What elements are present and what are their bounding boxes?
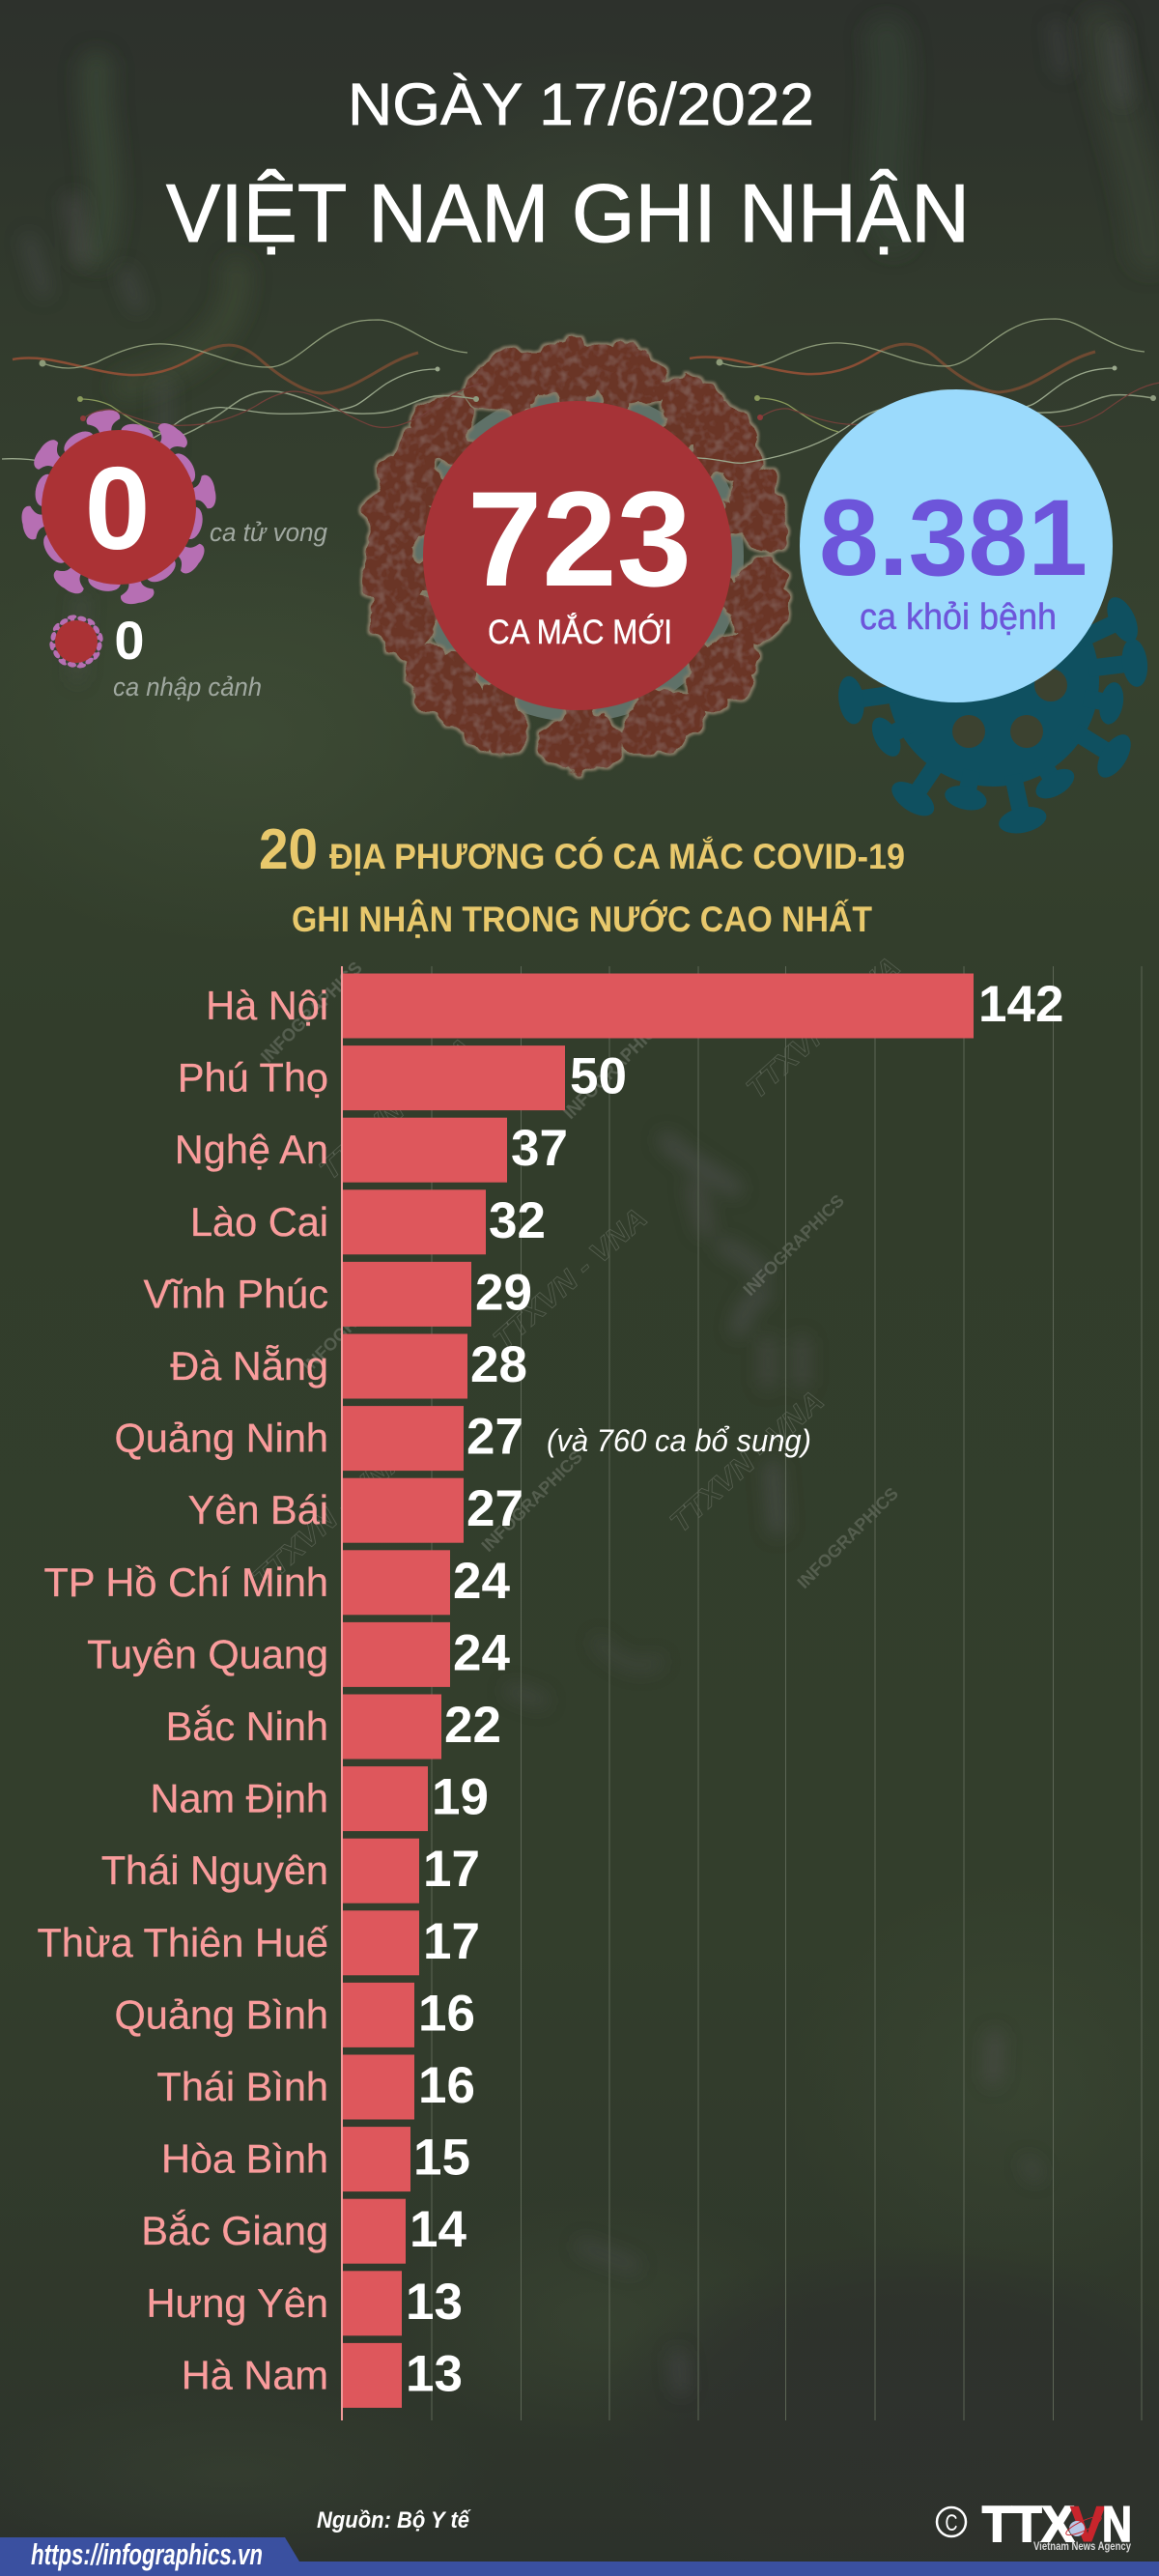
bar values: 22 xyxy=(444,1697,501,1754)
province labels: Hưng Yên xyxy=(146,2280,328,2326)
watermarks: TTXVN - VNA xyxy=(488,1202,654,1357)
chart heading: ĐỊA PHƯƠNG CÓ CA MẮC COVID-19 xyxy=(329,836,905,876)
watermarks: INFOGRAPHICS xyxy=(740,1191,848,1300)
province labels: Hà Nội xyxy=(206,983,328,1028)
bar values: 15 xyxy=(413,2130,470,2187)
bar values: 17 xyxy=(423,1913,480,1970)
province labels: Thái Nguyên xyxy=(101,1847,328,1893)
stat: imported cases xyxy=(49,610,262,701)
province labels: Yên Bái xyxy=(188,1487,328,1532)
watermarks: INFOGRAPHICS xyxy=(560,1015,668,1123)
bar: Bắc Ninh xyxy=(343,1695,441,1759)
icon: brown coronavirus behind new cases xyxy=(355,333,800,775)
bar values: 142 xyxy=(978,976,1063,1033)
bar: Hà Nam xyxy=(343,2343,402,2408)
province labels: Thừa Thiên Huế xyxy=(37,1920,328,1965)
logo: TTXVN: TTX xyxy=(982,2497,1074,2553)
logo: TTXVN: V xyxy=(1070,2497,1105,2553)
stat: new cases xyxy=(423,401,732,710)
bar: Thái Nguyên xyxy=(343,1839,419,1903)
bar values xyxy=(406,976,1063,2402)
bar values: 24 xyxy=(453,1624,510,1681)
stat: recovered xyxy=(800,389,1113,702)
bar: Thái Bình xyxy=(343,2054,414,2120)
footer bar xyxy=(0,2537,1159,2576)
chart heading xyxy=(259,817,905,939)
chart heading: 20 xyxy=(259,817,318,881)
bar: Quảng Bình xyxy=(343,1983,414,2047)
stat: deaths xyxy=(19,408,327,607)
bar: Bắc Giang xyxy=(343,2199,406,2264)
bar: Hà Nội xyxy=(343,974,974,1038)
bar: Phú Thọ xyxy=(343,1045,565,1110)
watermarks xyxy=(247,951,907,1595)
province labels: Hòa Bình xyxy=(161,2136,328,2182)
recovered value: 8.381 xyxy=(819,477,1088,598)
bar values: 24 xyxy=(453,1553,510,1610)
new cases value: 723 xyxy=(467,463,692,615)
deaths value: 0 xyxy=(85,443,150,574)
bar: Hòa Bình xyxy=(343,2127,410,2191)
deaths label: ca tử vong xyxy=(210,518,327,547)
icon: small purple virus xyxy=(49,615,103,669)
province labels: Hà Nam xyxy=(182,2352,328,2397)
province labels: TP Hồ Chí Minh xyxy=(44,1560,328,1605)
logo: TTXVN xyxy=(937,2497,1132,2553)
note: Quảng Ninh: (và 760 ca bổ sung) xyxy=(547,1423,811,1458)
bar values: 37 xyxy=(511,1120,568,1177)
title: date: NGÀY 17/6/2022 xyxy=(348,72,814,137)
bar: Đà Nẵng xyxy=(343,1333,467,1399)
bar chart xyxy=(37,966,1142,2420)
province labels: Vĩnh Phúc xyxy=(143,1271,328,1316)
bar values: 13 xyxy=(406,2274,463,2331)
bar: Tuyên Quang xyxy=(343,1622,450,1687)
province labels: Bắc Ninh xyxy=(166,1703,328,1749)
imported value: 0 xyxy=(114,610,145,671)
logo: TTXVN: Vietnam News Agency xyxy=(1033,2539,1131,2553)
watermarks: INFOGRAPHICS xyxy=(478,1447,586,1556)
watermarks: INFOGRAPHICS xyxy=(794,1484,902,1592)
watermarks: TTXVN - VNA xyxy=(664,1385,831,1539)
province labels: Tuyên Quang xyxy=(87,1631,328,1676)
chart heading: GHI NHẬN TRONG NƯỚC CAO NHẤT xyxy=(292,899,872,939)
bar values: 13 xyxy=(406,2345,463,2402)
bar values: 19 xyxy=(432,1769,489,1826)
recovered label: ca khỏi bệnh xyxy=(860,597,1057,638)
bar values: 14 xyxy=(410,2201,466,2258)
logo: TTXVN: N xyxy=(1102,2497,1132,2553)
watermarks: TTXVN - VNA xyxy=(314,1032,480,1187)
bar values: 29 xyxy=(475,1264,532,1321)
watermarks: INFOGRAPHICS xyxy=(258,959,366,1067)
bar: Nam Định xyxy=(343,1766,428,1831)
province labels: Quảng Bình xyxy=(114,1991,328,2037)
province labels: Nam Định xyxy=(150,1776,328,1821)
province labels xyxy=(37,983,328,2397)
watermarks: TTXVN - VNA xyxy=(247,1441,413,1595)
bar values: 16 xyxy=(418,2057,475,2114)
bar: Hưng Yên xyxy=(343,2271,402,2335)
source: Nguồn: Bộ Y tế xyxy=(317,2507,471,2533)
copyright icon xyxy=(937,2507,966,2536)
bar values: 16 xyxy=(418,1985,475,2042)
bar values: 27 xyxy=(466,1480,523,1537)
province labels: Lào Cai xyxy=(190,1199,328,1245)
bar: Thừa Thiên Huế xyxy=(343,1910,419,1975)
province labels: Bắc Giang xyxy=(141,2208,328,2253)
icon: teal virus xyxy=(835,574,1150,838)
province labels: Đà Nẵng xyxy=(170,1343,328,1388)
wave lines left xyxy=(2,320,483,464)
website url: https://infographics.vn xyxy=(31,2537,263,2571)
bar values: 17 xyxy=(423,1841,480,1898)
icon: purple virus xyxy=(19,408,218,607)
bar: Vĩnh Phúc xyxy=(343,1262,471,1327)
copyright icon: C xyxy=(945,2510,958,2536)
province labels: Phú Thọ xyxy=(178,1055,328,1101)
bar values: 27 xyxy=(466,1409,523,1466)
province labels: Thái Bình xyxy=(156,2064,328,2109)
bar: Lào Cai xyxy=(343,1189,486,1254)
bar: Nghệ An xyxy=(343,1118,507,1183)
province labels: Nghệ An xyxy=(175,1127,328,1172)
imported label: ca nhập cảnh xyxy=(113,673,262,701)
watermarks: INFOGRAPHICS xyxy=(299,1268,408,1376)
bar: Yên Bái xyxy=(343,1478,464,1543)
wave lines right xyxy=(679,319,1159,463)
bar: Quảng Ninh xyxy=(343,1406,464,1471)
bar: TP Hồ Chí Minh xyxy=(343,1550,450,1615)
new cases label: CA MẮC MỚI xyxy=(488,613,672,651)
province labels: Quảng Ninh xyxy=(115,1416,328,1461)
bar values: 28 xyxy=(470,1336,527,1393)
bar values: 32 xyxy=(489,1192,546,1249)
watermarks: TTXVN - VNA xyxy=(741,951,907,1105)
title: Việt Nam ghi nhận: VIỆT NAM GHI NHẬN xyxy=(166,168,970,260)
bar values: 50 xyxy=(570,1048,627,1105)
